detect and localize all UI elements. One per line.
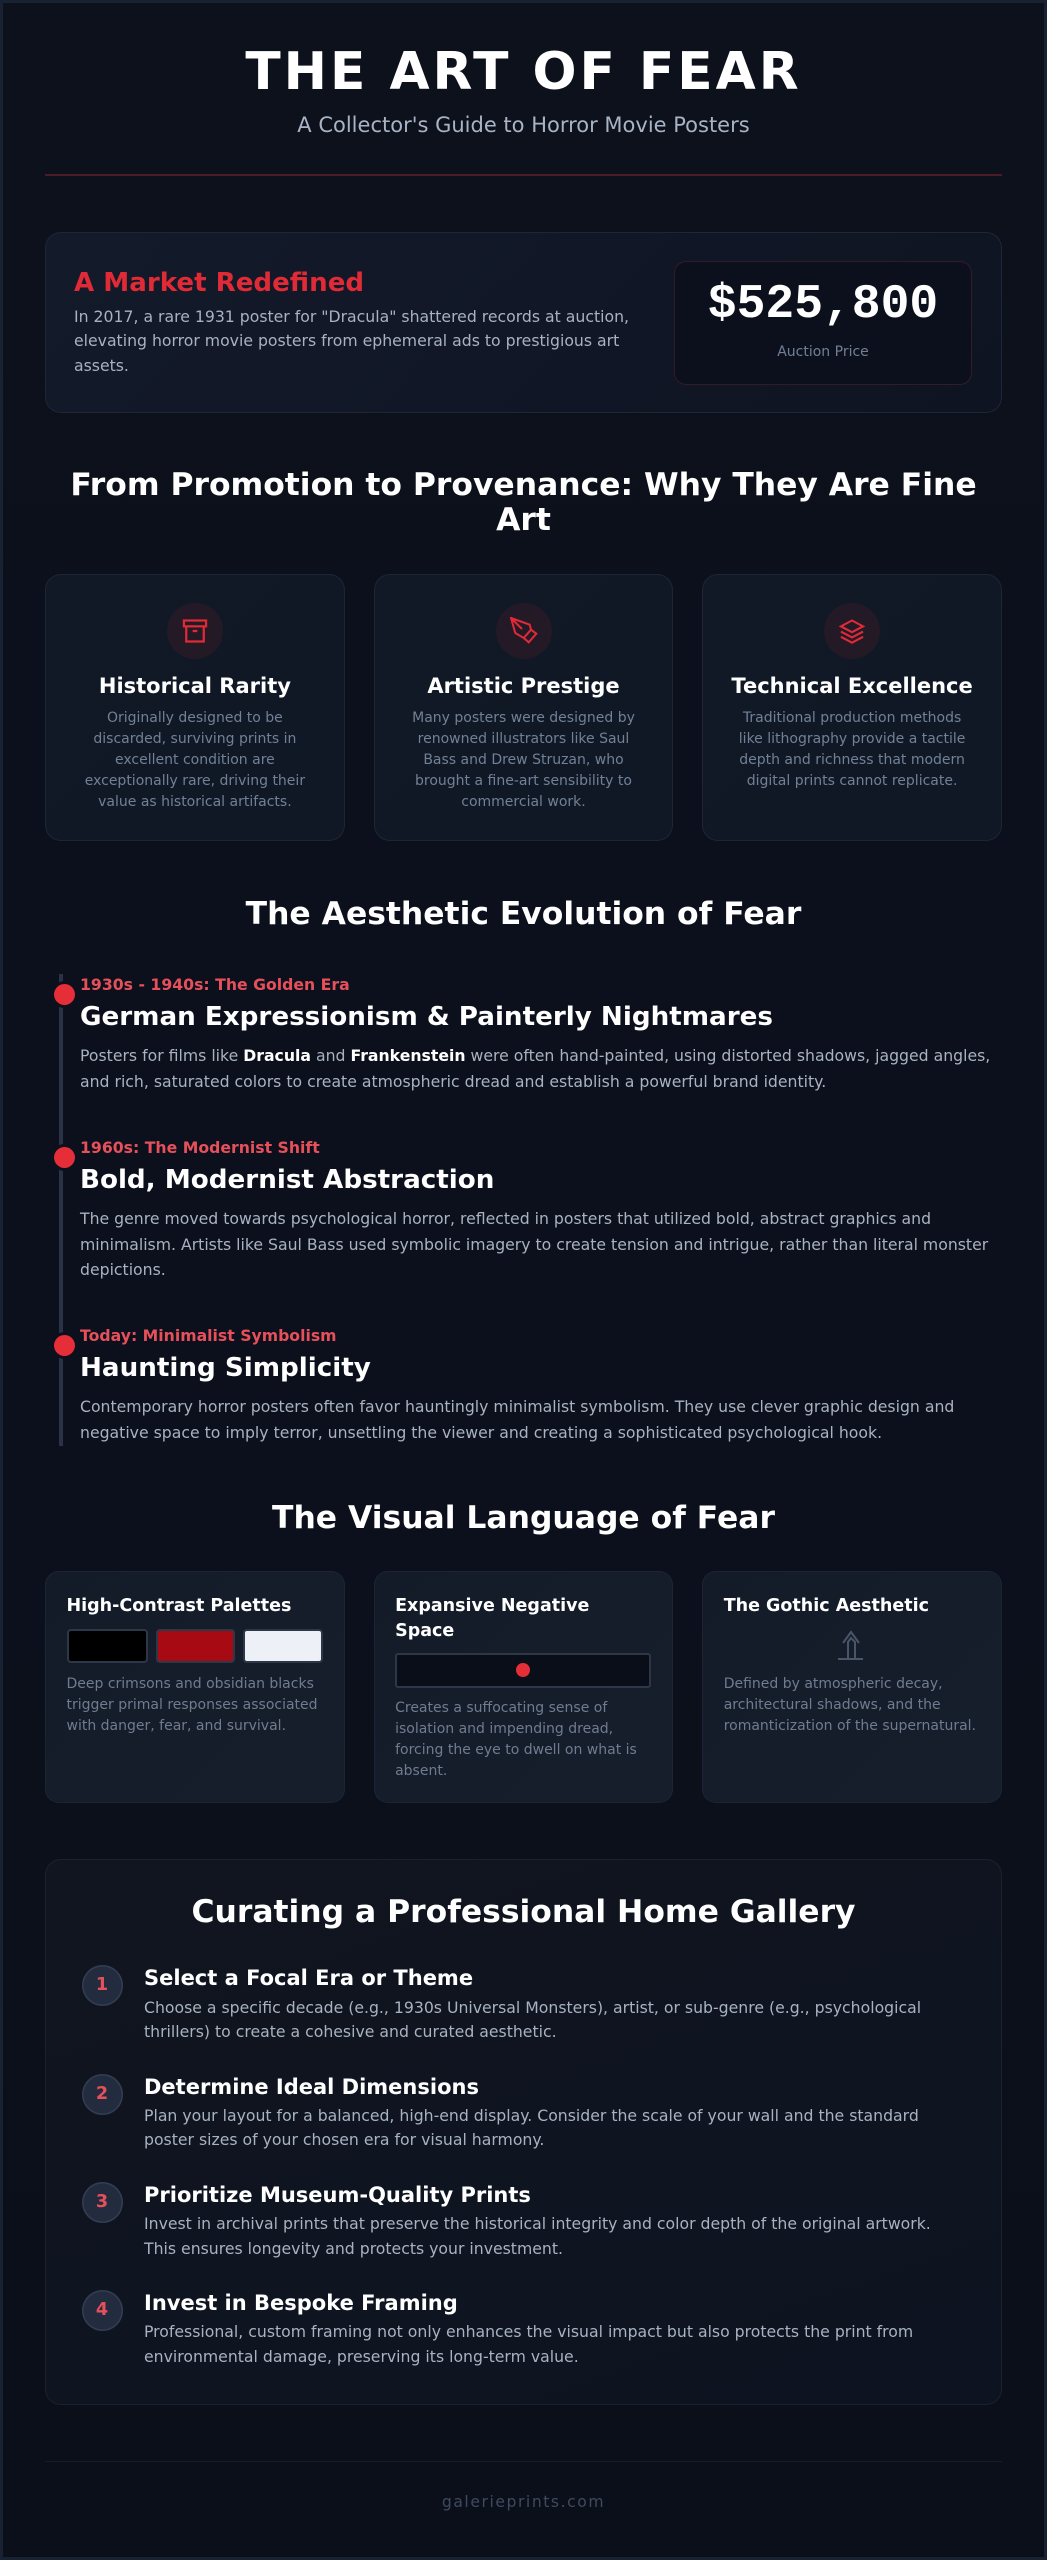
card title: Space: [395, 1621, 454, 1641]
card text: trigger primal responses associated: [66, 1697, 318, 1713]
step number: 4: [96, 2300, 108, 2320]
entry text: The genre moved towards psychological horror, reflected in posters that utilized bold, abstract graphics and: [80, 1209, 931, 1228]
card title: Historical Rarity: [99, 674, 291, 698]
card text: brought a fine-art sensibility to: [415, 773, 632, 789]
heading: visual language: The Visual Language of Fear: [272, 1500, 775, 1536]
panel: fine art reasons: [45, 574, 1002, 841]
card title: Artistic Prestige: [427, 674, 620, 698]
panel: market redefined: [45, 232, 1002, 413]
timeline entry: minimalist symbolism: [54, 1326, 954, 1442]
card text: commercial work.: [461, 794, 586, 810]
card text: [412, 710, 635, 810]
card text: [724, 1676, 976, 1734]
card: expansive negative space: [374, 1571, 673, 1803]
era label: 1930s - 1940s: The Golden Era: [80, 975, 350, 994]
card text: Creates a suffocating sense of: [395, 1700, 607, 1716]
step 4: [82, 2290, 913, 2366]
entry text: negative space to imply terror, unsettling the viewer and creating a sophisticated psychological hook.: [80, 1423, 882, 1442]
entry title: Haunting Simplicity: [80, 1353, 371, 1383]
subtitle: A Collector's Guide to Horror Movie Posters: [297, 112, 750, 136]
card text: renowned illustrators like Saul: [418, 731, 629, 747]
card text: Originally designed to be: [107, 710, 283, 726]
step text: [144, 2322, 913, 2366]
step number: [82, 2182, 122, 2223]
card text: [85, 710, 306, 810]
panel: home gallery: [45, 1859, 1002, 2405]
card title: Expansive Negative: [395, 1596, 589, 1616]
card text: forcing the eye to dwell on what is: [395, 1742, 637, 1758]
card title: High-Contrast Palettes: [66, 1596, 291, 1616]
card text: Traditional production methods: [743, 710, 961, 726]
step number: 3: [96, 2192, 108, 2212]
card text: architectural shadows, and the: [724, 1697, 941, 1713]
timeline dot: [54, 1335, 75, 1356]
card text: [66, 1676, 318, 1734]
step text: [144, 1998, 921, 2041]
card: artistic prestige: [374, 574, 673, 841]
title: THE ART OF FEAR: [245, 42, 802, 102]
icon: pen nib: [496, 603, 552, 659]
timeline entry: golden era: [54, 975, 990, 1091]
heading: a market redefined: A Market Redefined: [74, 268, 364, 298]
card: gothic aesthetic: [702, 1571, 1002, 1803]
step text: [144, 2106, 919, 2149]
price label: Auction Price: [777, 344, 869, 360]
entry title: Bold, Modernist Abstraction: [80, 1165, 494, 1195]
entry text: depictions.: [80, 1260, 166, 1279]
card: high-contrast palettes: [45, 1571, 345, 1803]
card text: Defined by atmospheric decay,: [724, 1676, 943, 1692]
card text: discarded, surviving prints in: [93, 731, 296, 747]
card text: Bass and Drew Struzan, who: [423, 752, 624, 768]
text: market description: elevating horror movie posters from ephemeral ads to prestigious art: [74, 331, 619, 350]
timeline dot: [54, 984, 75, 1005]
step text: poster sizes of your chosen era for visual harmony.: [144, 2130, 544, 2149]
card text: Many posters were designed by: [412, 710, 635, 726]
heading: from promotion to provenance: From Promotion to Provenance: Why They Are Fine: [70, 467, 977, 503]
card text: romanticization of the supernatural.: [724, 1718, 976, 1734]
gallery heading: Curating a Professional Home Gallery: [191, 1894, 856, 1930]
step title: Determine Ideal Dimensions: [144, 2074, 479, 2098]
card text: isolation and impending dread,: [395, 1721, 613, 1737]
icon: gothic arch: [838, 1630, 863, 1660]
card title: Technical Excellence: [731, 674, 973, 698]
footer: website: galerieprints.com: [442, 2492, 605, 2510]
card text: [395, 1700, 637, 1779]
step text: Invest in archival prints that preserve the historical integrity and color depth of the original artwork.: [144, 2214, 931, 2233]
card title: The Gothic Aesthetic: [724, 1596, 929, 1616]
era label: Today: Minimalist Symbolism: [80, 1326, 337, 1345]
card: technical excellence: [702, 574, 1002, 841]
card text: value as historical artifacts.: [98, 794, 292, 810]
header divider: [45, 174, 1002, 176]
step number: [82, 2074, 122, 2114]
card text: exceptionally rare, driving their: [85, 773, 305, 789]
card text: absent.: [395, 1763, 447, 1779]
heading: from promotion to provenance: Art: [496, 502, 551, 538]
step text: [144, 2214, 931, 2258]
card title: [395, 1596, 589, 1641]
entry text: [80, 1046, 990, 1091]
entry text: minimalism. Artists like Saul Bass used symbolic imagery to create tension and intrigue, rather than literal monster: [80, 1235, 988, 1254]
entry title: German Expressionism & Painterly Nightmares: [80, 1002, 773, 1032]
card text: [739, 710, 965, 789]
card: historical rarity: [45, 574, 345, 841]
panel: visual language cards: [45, 1571, 1002, 1803]
heading: from promotion to provenance: [70, 467, 977, 538]
swatch: white: [243, 1628, 322, 1663]
step number: 2: [96, 2084, 108, 2104]
card text: like lithography provide a tactile: [739, 731, 965, 747]
red dot: [516, 1663, 530, 1677]
card text: depth and richness that modern: [739, 752, 965, 768]
entry text: [80, 1397, 954, 1442]
timeline dot: [54, 1147, 75, 1168]
entry text: and rich, saturated colors to create atmospheric dread and establish a powerful brand identity.: [80, 1072, 826, 1091]
swatch: crimson: [156, 1628, 235, 1663]
card text: excellent condition are: [115, 752, 275, 768]
timeline entry: modernist shift: [54, 1138, 988, 1279]
heading: aesthetic evolution: The Aesthetic Evolution of Fear: [246, 896, 801, 932]
step number: 1: [96, 1975, 108, 1995]
era label: 1960s: The Modernist Shift: [80, 1138, 320, 1157]
step 3: [82, 2182, 931, 2258]
step title: Prioritize Museum-Quality Prints: [144, 2183, 531, 2207]
step 2: [82, 2074, 919, 2149]
text: market description: In 2017, a rare 1931 poster for "Dracula" shattered records at auction,: [74, 307, 629, 326]
entry text: [80, 1209, 988, 1279]
timeline axis: [59, 974, 62, 1446]
footer divider: [45, 2461, 1002, 2462]
step text: environmental damage, preserving its long-term value.: [144, 2347, 579, 2366]
step number: [82, 2290, 122, 2331]
step text: Choose a specific decade (e.g., 1930s Universal Monsters), artist, or sub-genre (e.g., psychological: [144, 1998, 921, 2017]
text: market description: assets.: [74, 356, 129, 375]
step text: thrillers) to create a cohesive and curated aesthetic.: [144, 2022, 557, 2041]
step title: Select a Focal Era or Theme: [144, 1966, 473, 1990]
swatch: black: [67, 1628, 148, 1663]
step 1: [82, 1965, 921, 2041]
step text: This ensures longevity and protects your investment.: [144, 2239, 563, 2258]
card text: digital prints cannot replicate.: [747, 773, 957, 789]
step text: Plan your layout for a balanced, high-end display. Consider the scale of your wall and the standard: [144, 2106, 919, 2125]
timeline: [54, 974, 990, 1446]
step text: Professional, custom framing not only enhances the visual impact but also protects the print from: [144, 2322, 913, 2341]
negative space illustration: [395, 1653, 651, 1688]
entry text: Contemporary horror posters often favor hauntingly minimalist symbolism. They use clever graphic design and: [80, 1397, 954, 1416]
text: market description: [74, 307, 629, 375]
callout: auction price: [674, 261, 972, 385]
card text: Deep crimsons and obsidian blacks: [66, 1676, 314, 1692]
entry text: Posters for films like Dracula and Frankenstein were often hand-painted, using distorted shadows, jagged angles,: [80, 1046, 990, 1065]
price figure: $525,800: [708, 278, 938, 332]
step title: Invest in Bespoke Framing: [144, 2291, 458, 2315]
step number: [82, 1965, 122, 2006]
card text: with danger, fear, and survival.: [66, 1718, 286, 1734]
icon: layers: [824, 603, 880, 659]
icon: archive box: [167, 603, 223, 659]
